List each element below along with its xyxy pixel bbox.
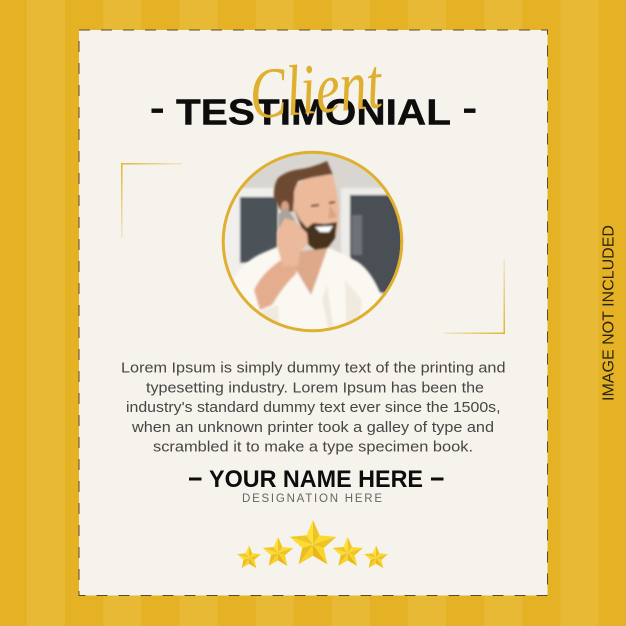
phone (278, 208, 295, 230)
body text: lorem ipsum (121, 360, 506, 456)
hand (277, 218, 308, 266)
heading: Client script: Client (246, 43, 386, 135)
beard (294, 208, 337, 250)
shirt (234, 246, 382, 330)
body text: lorem ipsum: industry's standard dummy text ever since the 1500s, (126, 399, 500, 416)
body text: lorem ipsum: typesetting industry. Lorem Ipsum has been the (146, 379, 484, 396)
ear (281, 201, 289, 215)
corner bracket: top left (121, 163, 182, 238)
body text: lorem ipsum: scrambled it to make a type specimen book. (153, 439, 473, 456)
body text: lorem ipsum: when an unknown printer took a galley of type and (131, 419, 494, 436)
forearm (254, 258, 298, 310)
designation: DESIGNATION HERE (242, 493, 382, 505)
rating: five gold stars (237, 520, 388, 568)
name: YOUR NAME HERE: YOUR NAME HERE (209, 466, 423, 493)
side note: image not included: IMAGE NOT INCLUDED (600, 225, 618, 401)
heading: TESTIMONIAL: TESTIMONIAL (176, 92, 451, 132)
hair (274, 161, 333, 213)
smile (315, 226, 333, 232)
face (293, 174, 339, 248)
panel: testimonial card (79, 30, 548, 596)
photo: man on phone in gold ring (222, 151, 405, 345)
neck and chest (295, 247, 328, 295)
nose (328, 206, 336, 219)
body text: lorem ipsum: Lorem Ipsum is simply dummy text of the printing and (121, 360, 506, 377)
eyes (311, 202, 335, 206)
corner bracket: bottom right (443, 260, 505, 334)
